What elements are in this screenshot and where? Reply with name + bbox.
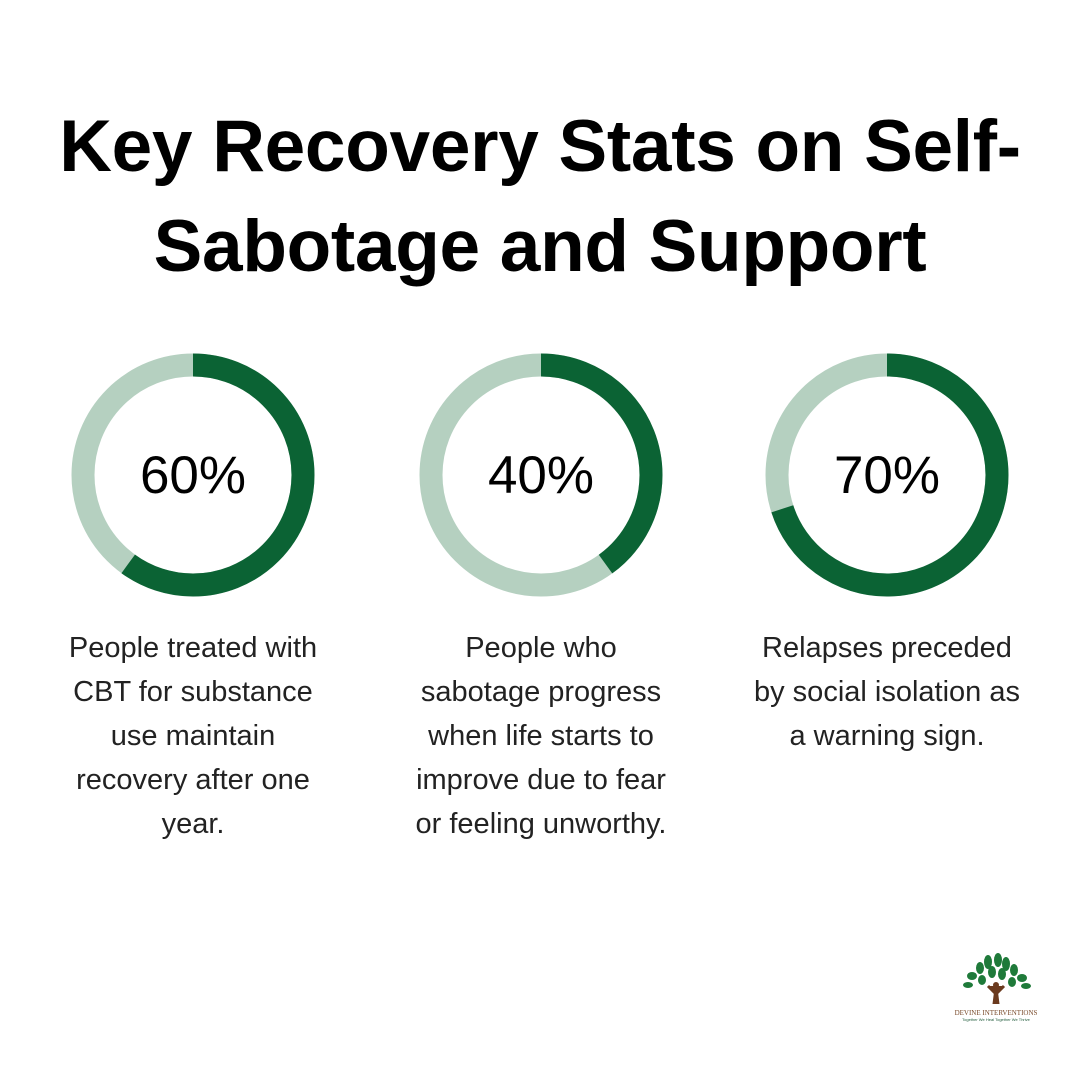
- title: Key Recovery Stats on Self-: [59, 106, 1021, 187]
- description 2: improve due to fear: [416, 764, 666, 796]
- title: Sabotage and Support: [154, 206, 926, 287]
- stat value 60%: 60%: [140, 446, 246, 505]
- description 3: a warning sign.: [789, 720, 985, 752]
- description 2: when life starts to: [428, 720, 654, 752]
- donut: 60%: [83, 365, 303, 585]
- stat value 70%: 70%: [834, 446, 940, 505]
- description 2: [416, 632, 666, 840]
- description 2: sabotage progress: [421, 676, 661, 708]
- title: [59, 106, 1021, 287]
- description 1: year.: [162, 808, 224, 840]
- logo: Together We Heal Together We Thrive: [962, 1017, 1030, 1022]
- description 1: CBT for substance: [73, 676, 313, 708]
- description 1: use maintain: [111, 720, 275, 752]
- description 1: [69, 632, 317, 840]
- description 3: [754, 632, 1020, 752]
- description 2: People who: [465, 632, 617, 664]
- description 3: Relapses preceded: [762, 632, 1012, 664]
- stat value 40%: 40%: [488, 446, 594, 505]
- donut: 70%: [777, 365, 997, 585]
- logo: [954, 953, 1037, 1022]
- logo: DEVINE INTERVENTIONS: [955, 1009, 1037, 1017]
- description 2: or feeling unworthy.: [416, 808, 666, 840]
- donut: 40%: [431, 365, 651, 585]
- description 1: People treated with: [69, 632, 317, 664]
- description 1: recovery after one: [76, 764, 310, 796]
- description 3: by social isolation as: [754, 676, 1020, 708]
